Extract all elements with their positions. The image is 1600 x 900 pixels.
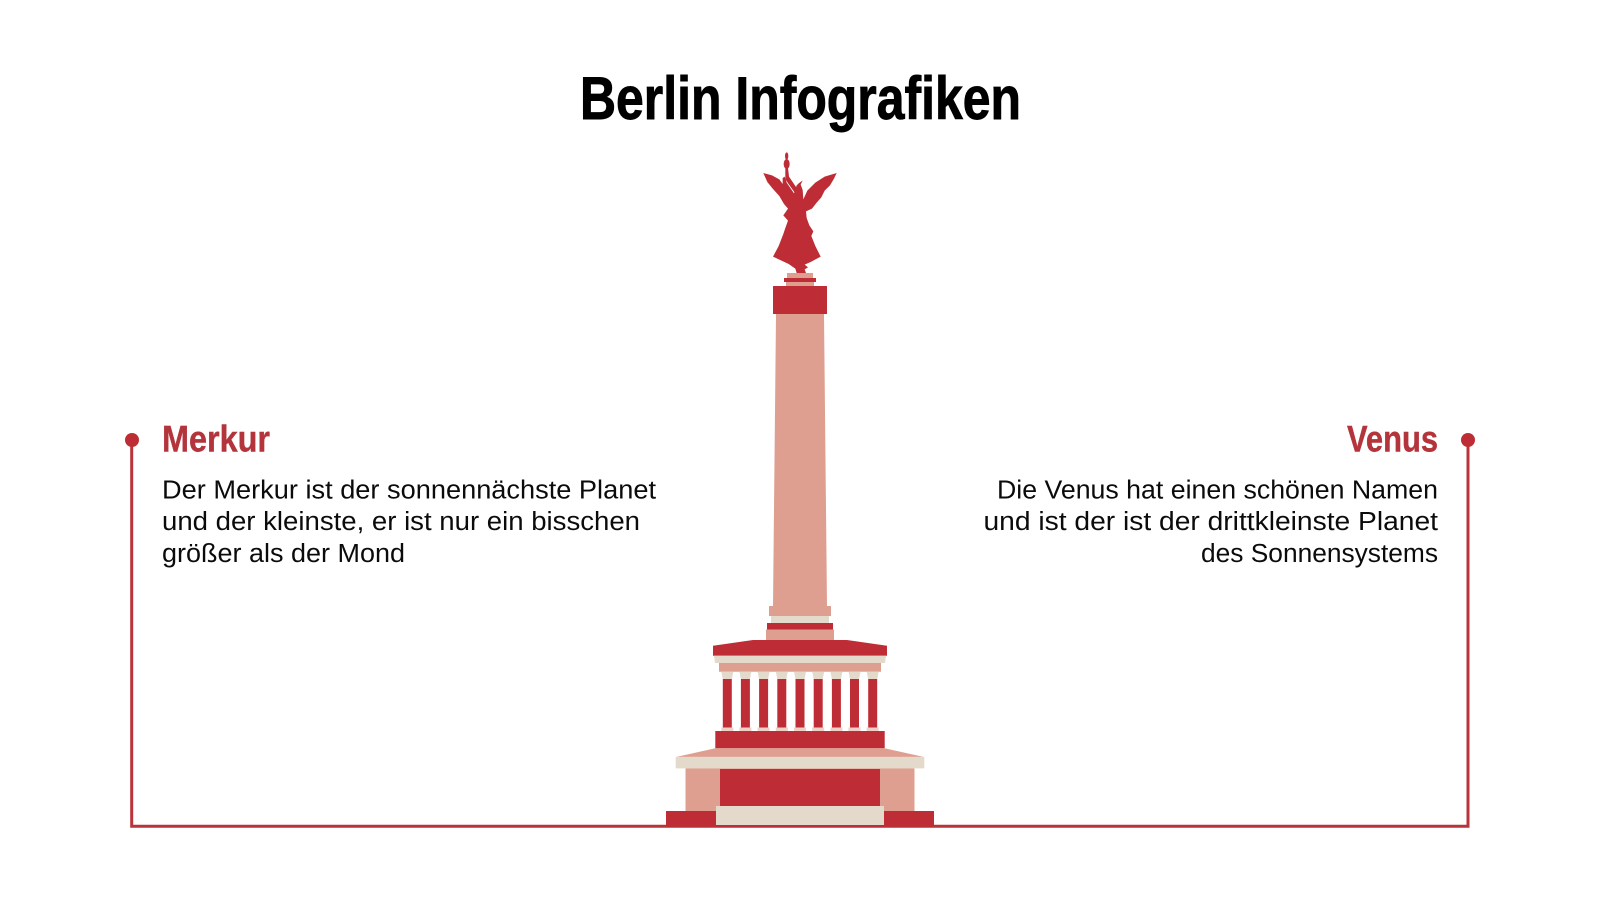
column: pedestal cap	[773, 273, 827, 314]
text block: Venus description: und ist der ist der drittkleinste Planet	[984, 508, 1438, 536]
text block: Merkur description: und der kleinste, er ist nur ein bisschen	[162, 508, 640, 536]
plinth	[666, 731, 934, 826]
text block: Venus description: Die Venus hat einen schönen Namen	[997, 476, 1438, 504]
colonnade: entablature	[713, 640, 887, 672]
column: shaft base	[766, 606, 834, 640]
column: shaft	[773, 314, 827, 606]
colonnade: columns	[721, 672, 879, 732]
text block: Venus description: des Sonnensystems	[1201, 540, 1438, 568]
text block: Merkur description: Der Merkur ist der sonnennächste Planet	[162, 476, 656, 504]
heading: Venus: Venus	[1347, 418, 1438, 460]
icon: Victoria statue	[763, 152, 837, 273]
text block: Merkur description: größer als der Mond	[162, 540, 405, 568]
connector line with end dots	[125, 433, 1475, 826]
panel: Merkur	[162, 418, 656, 568]
text block: Venus description	[984, 476, 1438, 568]
text block: Merkur description	[162, 476, 656, 568]
heading: Merkur: Merkur	[162, 418, 270, 460]
title: Berlin Infografiken	[580, 65, 1021, 132]
panel: Venus	[984, 418, 1438, 568]
illustration: Berlin Victory Column	[666, 152, 934, 827]
